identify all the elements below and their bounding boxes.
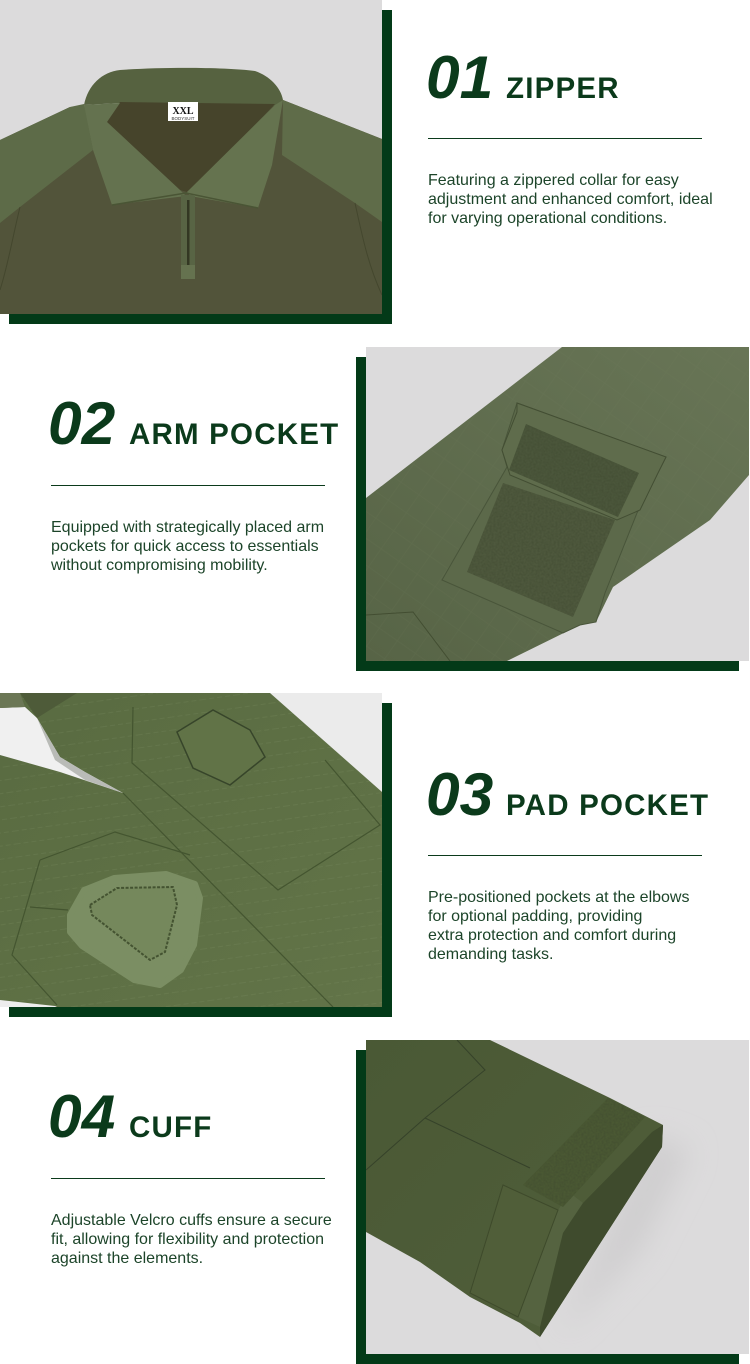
heading: arm pocket: ARM POCKET [129, 418, 339, 451]
text block: arm pocket: Equipped with strategically placed arm [51, 519, 324, 536]
heading: zipper: ZIPPER [506, 72, 620, 105]
backing block: pad pocket photo [9, 703, 392, 1017]
feature number 03: 03 [426, 760, 493, 828]
panel: cuff [48, 1040, 749, 1364]
text block: zipper: Featuring a zippered collar for easy [428, 172, 679, 189]
photo: elbow pad pocket [0, 693, 382, 1007]
backing block: arm pocket photo [356, 357, 739, 671]
text block: pad pocket: Pre-positioned pockets at the elbows [428, 889, 689, 906]
panel: arm pocket [48, 347, 749, 671]
photo: sleeve velcro cuff [366, 1040, 749, 1354]
text block: pad pocket: extra protection and comfort during [428, 927, 676, 944]
backing block: cuff photo [356, 1050, 739, 1364]
text block: cuff: Adjustable Velcro cuffs ensure a secure [51, 1212, 332, 1229]
size label [168, 102, 198, 121]
feature number 04: 04 [48, 1082, 115, 1150]
size label: XXL [172, 106, 194, 117]
heading: cuff: CUFF [129, 1111, 212, 1144]
text block: zipper: for varying operational conditions. [428, 210, 667, 227]
heading: pad pocket: PAD POCKET [506, 789, 709, 822]
text block: cuff: against the elements. [51, 1250, 203, 1267]
feature number 01: 01 [426, 43, 493, 111]
size label: BODYSUIT [171, 116, 195, 121]
elbow pad [70, 874, 200, 985]
text block: pad pocket: for optional padding, providing [428, 908, 642, 925]
text block: pad pocket: demanding tasks. [428, 946, 553, 963]
photo: shirt zipper collar [0, 0, 382, 314]
text block: arm pocket: without compromising mobility. [50, 557, 268, 574]
text block: zipper: adjustment and enhanced comfort, ideal [428, 191, 713, 208]
text block: cuff: fit, allowing for flexibility and protection [51, 1231, 324, 1248]
photo: sleeve arm pocket [366, 347, 749, 661]
panel: zipper [0, 0, 713, 324]
feature number 02: 02 [48, 389, 116, 457]
panel: pad pocket [0, 693, 709, 1017]
text block: arm pocket: pockets for quick access to essentials [51, 538, 319, 555]
backing block: zipper photo [9, 10, 392, 324]
